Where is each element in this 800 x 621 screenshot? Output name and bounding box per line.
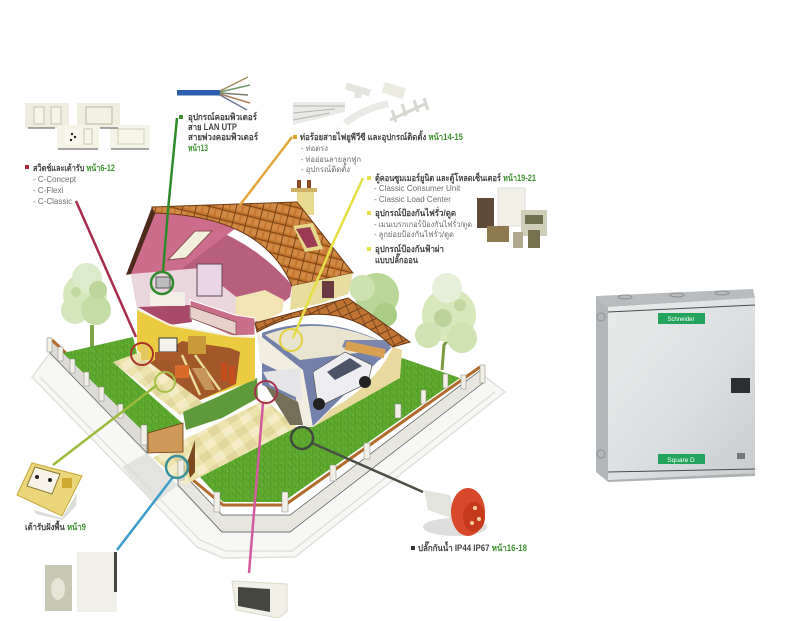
garage [257, 324, 402, 427]
tree: right [415, 273, 477, 370]
text: switches and outlets [25, 162, 115, 206]
text: consumer unit: อุปกรณ์ป้องกันฟ้าผ่า [375, 243, 444, 255]
text: consumer unit: - Classic Consumer Unit [374, 184, 461, 193]
callout: conduit line [240, 137, 292, 205]
text: computer equipment: หน้า13 [188, 143, 208, 153]
handle [731, 378, 750, 393]
house: garage roof [255, 298, 410, 347]
fence walls [49, 338, 483, 532]
gate [148, 423, 195, 478]
product label: Square D [667, 457, 695, 464]
house: main roof [126, 202, 353, 310]
brand label [658, 313, 705, 324]
house: lower floor [137, 309, 255, 400]
sidewalk and curb [32, 353, 505, 558]
callout: consumer unit line [280, 178, 363, 351]
product: door bell [45, 552, 117, 612]
text: consumer unit: - เมนเบรกเกอร์ป้องกันไฟรั่ว/ดูด [374, 218, 472, 230]
callout: switches line [76, 201, 153, 365]
text: switches and outlets: สวิตช์และเต้ารับ หน้า6-12 [33, 162, 115, 173]
text: conduit [293, 130, 463, 174]
text: consumer unit: ตู้คอนซูมเมอร์ยูนิต และตู้โหลดเซ็นเตอร์ หน้า19-21 [375, 171, 536, 184]
text: conduit: - ท่ออ่อนลายลูกฟูก [301, 155, 361, 165]
callout: door bell line [117, 456, 188, 550]
driveway [153, 400, 297, 485]
garden path [113, 352, 205, 415]
text: computer equipment: อุปกรณ์คอมพิวเตอร์ [188, 111, 257, 123]
tree: behind house [349, 273, 399, 327]
brand label: Schneider [667, 317, 695, 323]
text: conduit: - อุปกรณ์ติดตั้ง [301, 163, 350, 174]
product: large load center panel [596, 289, 755, 482]
text: conduit: ท่อร้อยสายไฟยูพีวีซี และอุปกรณ์ติดตั้ง หน้า14-15 [300, 130, 463, 143]
text: computer equipment [179, 111, 258, 153]
house: upper floor interior [131, 213, 292, 336]
product label [658, 454, 705, 464]
product: floor outlet [17, 463, 82, 520]
product: distribution boards [477, 188, 547, 248]
callout: floor outlet line [53, 372, 175, 465]
chimney [291, 180, 317, 215]
callout: plug line [291, 427, 423, 492]
fence posts [47, 338, 485, 512]
product: LAN cable [177, 77, 250, 110]
text: computer equipment: สายพ่วงคอมพิวเตอร์ [188, 131, 258, 142]
text: consumer unit: อุปกรณ์ป้องกันไฟรั่ว/ดูด [375, 206, 456, 219]
product: wall switches [25, 103, 150, 149]
hedge [183, 378, 258, 430]
callout: enclosure line [249, 381, 277, 573]
text: waterproof plug: ปลั๊กกันน้ำ IP44 IP67 หน้า16-18 [418, 541, 527, 553]
lawn right [200, 358, 460, 502]
tree: left [61, 263, 111, 355]
product: PVC conduit [293, 82, 428, 125]
text: conduit: - ท่อตรง [301, 144, 328, 153]
text: floor outlet: เต้ารับฝังพื้น หน้า9 [25, 520, 86, 532]
text: switches and outlets: - C-Classic [33, 197, 72, 206]
product: enclosure box [232, 581, 287, 618]
computer desk [150, 277, 185, 306]
text: switches and outlets: - C-Concept [33, 175, 77, 184]
text: consumer unit: แบบปลั๊กออน [375, 253, 419, 265]
text: computer equipment: สาย LAN UTP [188, 122, 237, 132]
product: waterproof plug [423, 488, 487, 536]
text: switches and outlets: - C-Flexi [33, 186, 63, 195]
text: consumer unit: - ลูกย่อยป้องกันไฟรั่ว/ดูด [374, 228, 454, 240]
text: consumer unit: - Classic Load Center [374, 195, 451, 204]
callout: computer line [151, 118, 177, 294]
text: consumer unit [367, 171, 536, 265]
lawn left [63, 337, 182, 435]
